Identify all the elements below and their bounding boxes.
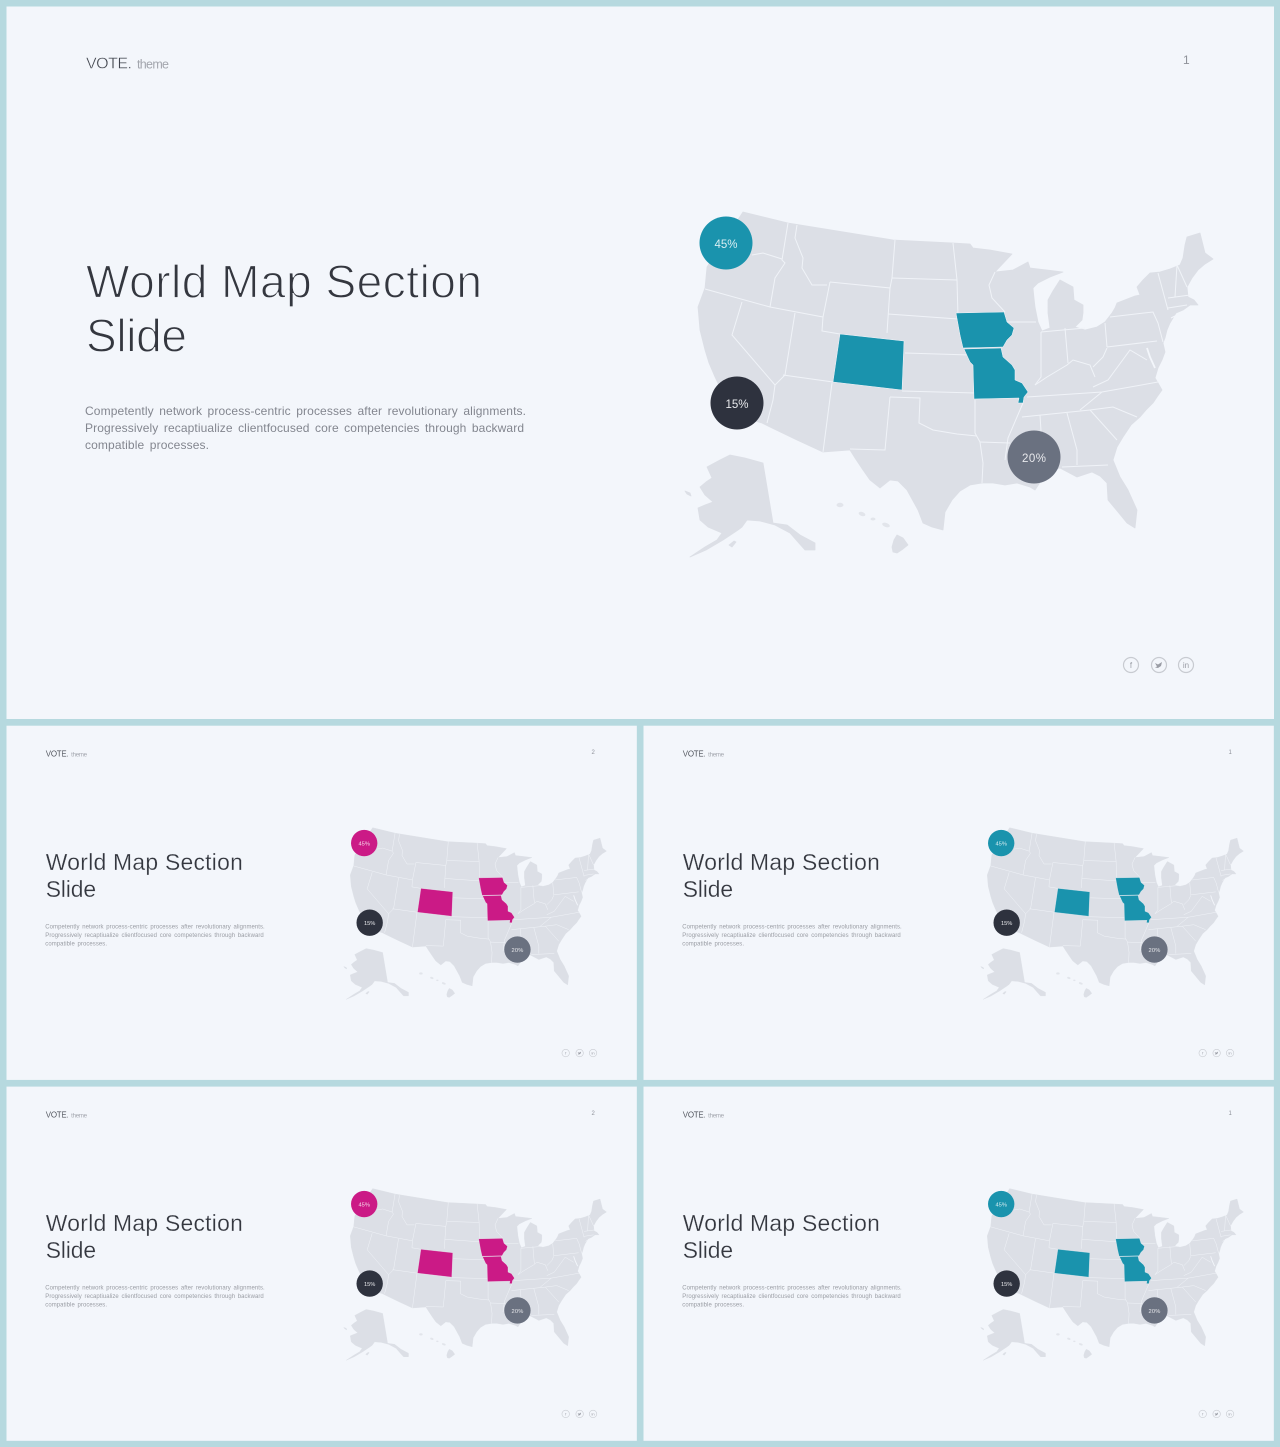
body text: Progressively recaptiualize clientfocused core competencies through backward	[45, 933, 264, 939]
social icons: f	[565, 1051, 567, 1056]
body text	[682, 925, 902, 948]
social icons: in	[1229, 1411, 1232, 1416]
brand label: theme	[71, 752, 88, 759]
marker 15%	[356, 910, 383, 936]
brand label: VOTE.	[86, 56, 132, 72]
marker 45%	[988, 1191, 1014, 1217]
social icons	[562, 1049, 597, 1057]
marker 45%: 45%	[714, 239, 738, 251]
title: Slide	[683, 1237, 733, 1263]
marker 45%: 45%	[358, 1202, 370, 1208]
body text: compatible processes.	[682, 942, 744, 948]
marker 20%: 20%	[1148, 948, 1160, 954]
panel: slide thumbnail teal bottom	[644, 1087, 1274, 1441]
social icons: in	[1229, 1051, 1232, 1056]
brand label: theme	[137, 58, 169, 72]
marker 15%: 15%	[364, 921, 375, 927]
panel: main slide	[6, 6, 1274, 719]
US map	[981, 828, 1243, 999]
body text: compatible processes.	[45, 1302, 107, 1308]
brand label	[683, 750, 725, 759]
marker 20%: 20%	[511, 1309, 523, 1315]
social icons: f	[1202, 1411, 1204, 1416]
title: Slide	[46, 1237, 96, 1263]
US map	[344, 828, 606, 999]
body text: Competently network process-centric processes after revolutionary alignments.	[85, 404, 526, 418]
page number: 1	[1229, 750, 1233, 756]
social icons: f	[1130, 661, 1133, 670]
marker 45%	[988, 830, 1014, 856]
marker 20%	[1008, 430, 1060, 484]
body text	[682, 1286, 902, 1308]
brand label: VOTE.	[683, 1110, 706, 1119]
marker 15%: 15%	[1001, 1282, 1012, 1288]
body text	[45, 1286, 265, 1308]
social icons	[1199, 1049, 1234, 1057]
body text: compatible processes.	[85, 438, 209, 452]
social icons: in	[592, 1051, 595, 1056]
marker 45%: 45%	[995, 1202, 1007, 1208]
title	[46, 849, 243, 902]
title	[46, 1210, 243, 1263]
page number: 2	[592, 1111, 596, 1117]
body text: Competently network process-centric processes after revolutionary alignments.	[682, 1286, 902, 1292]
social icons: f	[1202, 1051, 1204, 1056]
marker 45%: 45%	[995, 842, 1007, 848]
social icons: in	[592, 1411, 595, 1416]
brand label	[46, 750, 88, 759]
title: World Map Section	[46, 1210, 243, 1236]
body text: compatible processes.	[682, 1302, 744, 1308]
brand label: VOTE.	[683, 750, 706, 759]
US map	[344, 1189, 606, 1360]
marker 20%	[504, 936, 531, 963]
body text	[45, 925, 265, 948]
US map	[685, 212, 1213, 557]
body text: Progressively recaptiualize clientfocused core competencies through backward	[45, 1294, 264, 1300]
social icons: in	[1183, 661, 1189, 670]
body text: Competently network process-centric processes after revolutionary alignments.	[682, 925, 902, 931]
title	[683, 1210, 880, 1263]
title: World Map Section	[46, 849, 243, 875]
title: Slide	[46, 876, 96, 902]
social icons	[1199, 1410, 1234, 1418]
brand label: theme	[708, 1112, 725, 1119]
brand label: VOTE.	[46, 1110, 69, 1119]
marker 20%: 20%	[1148, 1309, 1160, 1315]
social icons: f	[565, 1411, 567, 1416]
page number: 1	[1229, 1111, 1233, 1117]
marker 45%	[351, 1191, 377, 1217]
page number: 1	[1183, 53, 1190, 67]
panel: slide thumbnail teal top	[644, 726, 1274, 1080]
body text: Progressively recaptiualize clientfocused core competencies through backward	[85, 421, 524, 435]
brand label	[683, 1110, 725, 1119]
panel: slide thumbnail magenta top	[6, 726, 637, 1080]
marker 45%	[351, 830, 377, 856]
title	[86, 256, 482, 362]
title: World Map Section	[683, 849, 880, 875]
body text: Competently network process-centric processes after revolutionary alignments.	[45, 925, 265, 931]
marker 20%	[1141, 936, 1168, 963]
title: Slide	[683, 876, 733, 902]
marker 20%: 20%	[1022, 453, 1046, 465]
marker 20%: 20%	[511, 948, 523, 954]
page number: 2	[592, 750, 596, 756]
body text	[85, 404, 526, 452]
body text: Progressively recaptiualize clientfocused core competencies through backward	[682, 933, 901, 939]
body text: Competently network process-centric processes after revolutionary alignments.	[45, 1286, 265, 1292]
marker 15%	[356, 1270, 383, 1297]
social icons	[562, 1410, 597, 1418]
brand label: VOTE.	[46, 750, 69, 759]
brand label	[46, 1110, 88, 1119]
marker 15%: 15%	[726, 399, 748, 411]
brand label	[86, 56, 169, 72]
body text: Progressively recaptiualize clientfocused core competencies through backward	[682, 1294, 901, 1300]
marker 20%	[504, 1297, 531, 1324]
brand label: theme	[708, 752, 725, 759]
marker 15%	[993, 1270, 1020, 1297]
marker 15%: 15%	[364, 1282, 375, 1288]
body text: compatible processes.	[45, 942, 107, 948]
marker 15%: 15%	[1001, 921, 1012, 927]
title: World Map Section	[86, 256, 482, 308]
title: Slide	[86, 310, 187, 362]
title: World Map Section	[683, 1210, 880, 1236]
panel: slide thumbnail magenta bottom	[6, 1087, 637, 1441]
marker 45%	[700, 216, 752, 270]
brand label: theme	[71, 1112, 88, 1119]
marker 15%	[710, 376, 764, 430]
title	[683, 849, 880, 902]
social icons	[1124, 658, 1194, 672]
marker 15%	[993, 910, 1020, 936]
marker 45%: 45%	[358, 842, 370, 848]
marker 20%	[1141, 1297, 1168, 1324]
US map	[981, 1189, 1243, 1360]
